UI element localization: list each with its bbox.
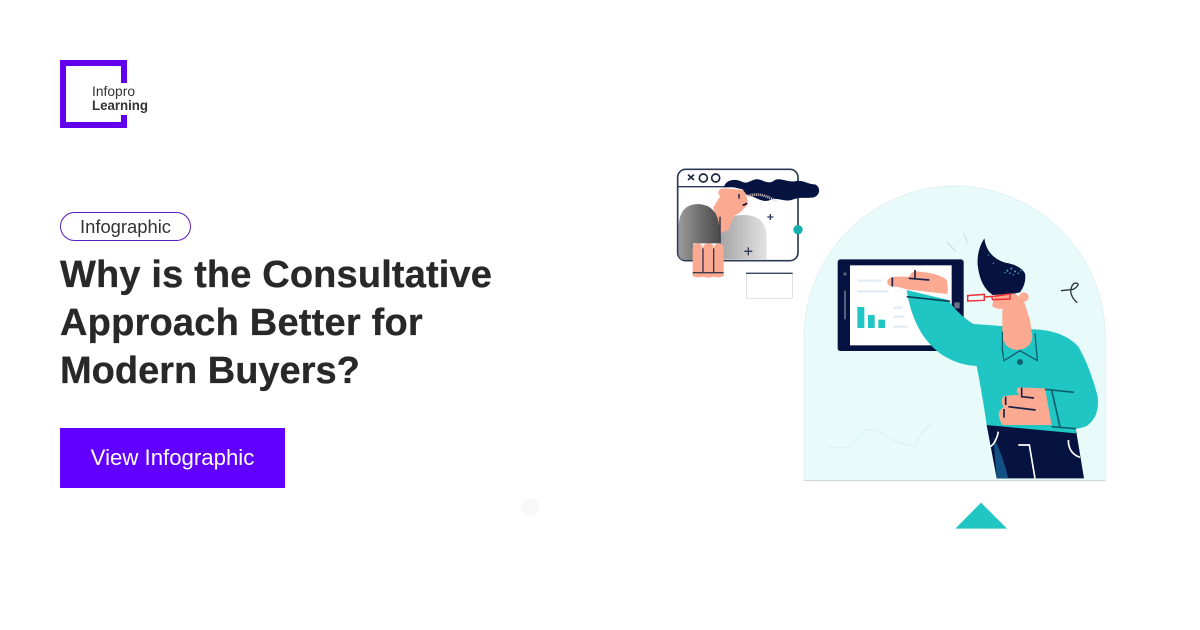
title: Approach Better for — [60, 302, 423, 344]
title: Why is the Consultative — [60, 254, 492, 296]
logo: Infopro — [92, 84, 135, 99]
tag: Infographic: Infographic — [80, 216, 171, 237]
arch background — [804, 186, 1105, 481]
man — [887, 238, 1098, 478]
tablet — [838, 259, 964, 351]
button: View Infographic: View Infographic — [91, 445, 254, 470]
triangle — [955, 503, 1007, 529]
logo: Learning — [92, 97, 148, 113]
logo — [60, 60, 148, 128]
illustration: man pointing at tablet — [804, 186, 1106, 529]
tag: Infographic — [60, 212, 191, 241]
illustration: woman in browser window — [676, 168, 820, 299]
title — [60, 254, 492, 392]
title: Modern Buyers? — [60, 350, 360, 392]
button: View Infographic — [60, 428, 285, 488]
decorative dot — [521, 498, 539, 516]
